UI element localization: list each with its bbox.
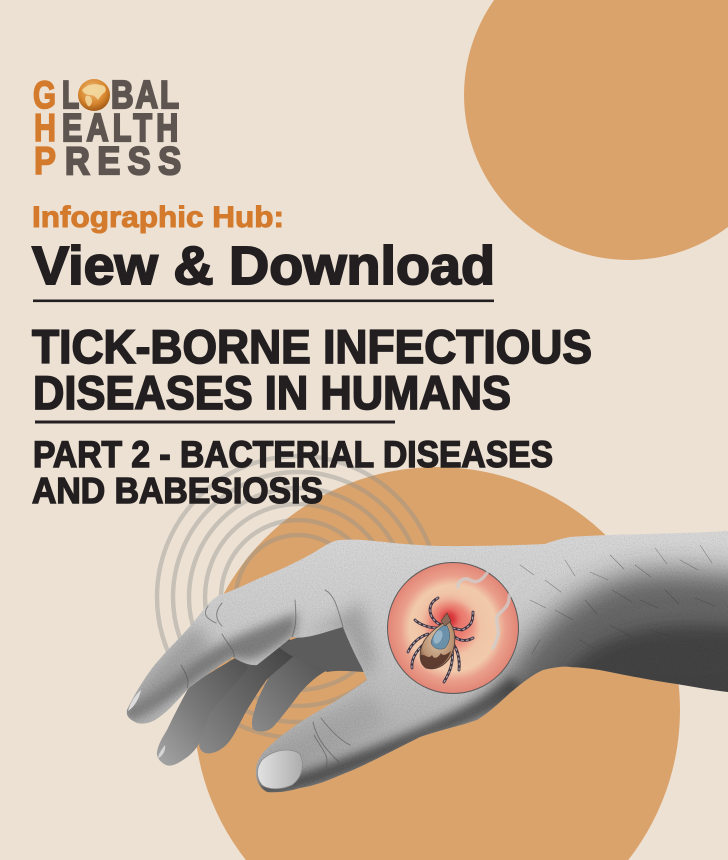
logo: Global Health Press: P [34, 140, 56, 183]
hand shading [120, 525, 728, 800]
logo globe icon [78, 79, 110, 111]
decorative circle: bottom [194, 467, 680, 860]
logo: Global Health Press: G [33, 74, 56, 117]
title: TICK-BORNE INFECTIOUS [32, 321, 592, 374]
tick scutum highlight [432, 629, 444, 645]
subtitle: PART 2 - BACTERIAL DISEASES [33, 434, 553, 475]
back of hand, thumb and arm [127, 531, 728, 792]
skin rash circle [388, 562, 518, 694]
logo: Global Health Press: BAL [111, 74, 179, 117]
tick abdomen markings [421, 651, 451, 669]
concentric rings [157, 456, 439, 738]
tick body [420, 620, 455, 669]
subtitle: AND BABESIOSIS [32, 470, 323, 511]
migrating spirochete trails [458, 573, 523, 648]
heading: Infographic Hub: Infographic Hub: [32, 201, 284, 234]
palm underside [275, 622, 364, 672]
thumb nail [258, 750, 302, 789]
logo: Global Health Press: H [34, 107, 56, 150]
logo: Global Health Press [33, 74, 181, 183]
decorative circle: top right [464, 0, 728, 260]
middle finger nail [158, 745, 165, 758]
subtitle [32, 434, 553, 511]
tick head [441, 613, 451, 626]
logo: Global Health Press: EALTH [62, 106, 178, 150]
logo: Global Health Press: RESS [65, 139, 181, 182]
tick bite inset [388, 562, 523, 694]
bite redness [427, 601, 471, 645]
finger creases [181, 590, 350, 768]
hand and forearm photo illustration [120, 525, 728, 800]
ring finger [199, 635, 300, 753]
logo: Global Health Press: L [62, 74, 79, 117]
tick legs [408, 598, 473, 682]
divider under title [35, 420, 395, 424]
title: DISEASES IN HUMANS [33, 366, 511, 419]
divider under heading [33, 300, 494, 302]
pinky finger [252, 640, 332, 731]
title [32, 321, 592, 419]
index finger nail [128, 690, 141, 711]
arm hairs [520, 545, 715, 654]
heading: View & Download: View & Download [32, 236, 495, 296]
tick scutum [431, 624, 450, 649]
middle finger [157, 655, 248, 766]
